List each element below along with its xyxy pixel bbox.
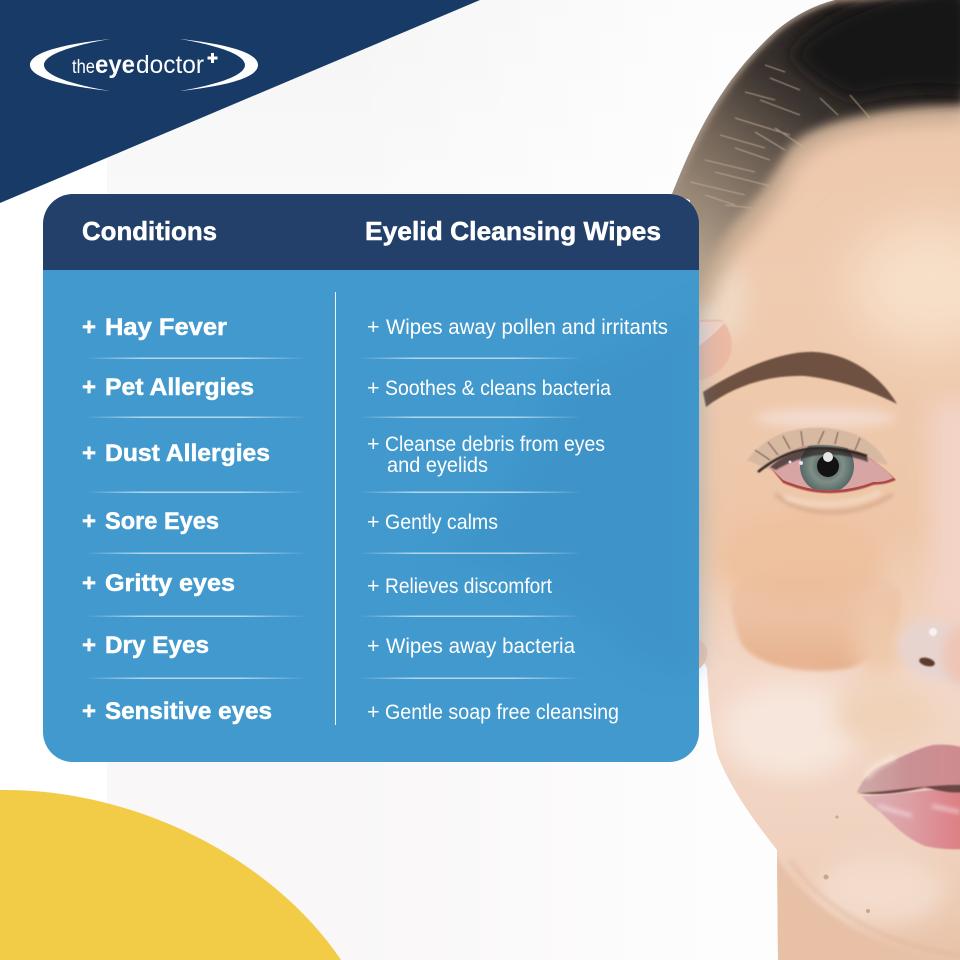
left column: conditions: Dry Eyes	[105, 632, 209, 659]
finger	[699, 320, 732, 380]
right column: benefits: +	[367, 634, 380, 658]
right column: benefits: +	[367, 432, 380, 456]
panel header	[43, 194, 699, 270]
nose wing	[894, 620, 952, 678]
logo wordmark: eye	[95, 51, 135, 79]
left column: conditions: +	[82, 508, 96, 535]
cheek fade toward nose	[852, 618, 903, 680]
lower lid	[775, 494, 893, 512]
mouth opening	[857, 785, 960, 794]
logo wordmark: the	[72, 57, 95, 78]
left column: conditions: +	[82, 698, 96, 725]
right column: benefits: +	[367, 315, 380, 339]
jaw edge	[790, 861, 897, 940]
moles	[824, 816, 870, 913]
left column: conditions: Pet Allergies	[105, 374, 254, 401]
left column: conditions	[82, 314, 272, 725]
iris	[800, 445, 854, 490]
eye socket shade	[755, 408, 895, 428]
ear	[695, 630, 707, 669]
fingernail	[699, 321, 727, 346]
left column: conditions: +	[82, 374, 96, 401]
left column: conditions: Hay Fever	[105, 314, 227, 341]
heading: conditions: Conditions	[82, 216, 217, 246]
hairline fade	[684, 101, 960, 318]
left column: conditions: Sensitive eyes	[105, 698, 272, 725]
eyebrow	[703, 352, 897, 407]
forehead highlight	[850, 220, 960, 350]
upper lid	[747, 428, 888, 470]
upper cheek	[718, 529, 882, 602]
left column: conditions: Dust Allergies	[105, 440, 270, 467]
left column: conditions: +	[82, 440, 96, 467]
logo plus	[208, 53, 218, 63]
nose bridge	[930, 400, 960, 620]
right column: benefits: Cleanse debris from eyes	[385, 432, 605, 456]
eye	[770, 444, 896, 494]
logo wordmark: doctor	[136, 51, 204, 79]
right column: benefits: Gentle soap free cleansing	[385, 700, 619, 724]
right column: benefits: +	[367, 574, 380, 598]
left column: conditions: +	[82, 632, 96, 659]
sclera	[770, 445, 893, 490]
lashes	[755, 431, 860, 460]
lash line	[758, 448, 867, 472]
pupil	[817, 455, 839, 477]
panel body	[43, 270, 699, 762]
chin pale	[815, 855, 945, 925]
temple highlight	[698, 260, 746, 340]
logo	[30, 39, 258, 91]
silhouette edge softening	[672, 0, 835, 194]
cheek warm patch	[732, 586, 900, 673]
right column: benefits: +	[367, 700, 380, 724]
neck shadow	[777, 856, 872, 954]
top-left navy triangle	[0, 0, 480, 203]
left column: conditions: Sore Eyes	[105, 508, 219, 535]
right column: benefits: Soothes & cleans bacteria	[385, 376, 611, 400]
catchlight	[823, 452, 833, 462]
lip corner highlight	[866, 757, 895, 778]
lower lid light	[785, 492, 880, 504]
left column: conditions: +	[82, 570, 96, 597]
lower cheek pale	[720, 682, 860, 778]
nose right tone	[943, 625, 960, 685]
yellow corner shape	[0, 790, 341, 960]
right column: benefits: Wipes away bacteria	[386, 634, 575, 658]
right column: benefits: Wipes away pollen and irritants	[386, 315, 668, 339]
panel: comparison table	[43, 194, 699, 762]
right column: benefits: Relieves discomfort	[385, 574, 552, 598]
right column: benefits: +	[367, 376, 380, 400]
skin base	[660, 0, 960, 960]
left column: conditions: +	[82, 314, 96, 341]
lip gloss	[878, 806, 960, 816]
nostril	[918, 656, 936, 668]
heading: eyelid cleansing wipes: Eyelid Cleansing Wipes	[365, 216, 661, 246]
nose highlight	[929, 628, 937, 636]
hair dark crown	[790, 0, 960, 100]
photo: woman's face	[660, 0, 960, 960]
hair strands light	[690, 65, 870, 208]
left column: conditions: Gritty eyes	[105, 570, 235, 597]
mouth side skin	[829, 690, 928, 744]
logo right swoosh	[180, 39, 258, 91]
logo left swoosh	[30, 39, 110, 91]
hair	[672, 0, 960, 284]
lip upper	[857, 745, 960, 793]
right column: benefits	[367, 315, 668, 724]
right column: benefits: and eyelids	[387, 453, 488, 477]
right column: benefits: +	[367, 510, 380, 534]
right column: benefits: Gently calms	[385, 510, 498, 534]
faint face shadow	[430, 300, 699, 674]
column divider	[335, 292, 336, 725]
lip lower	[862, 788, 960, 849]
lid shadow	[770, 448, 868, 470]
